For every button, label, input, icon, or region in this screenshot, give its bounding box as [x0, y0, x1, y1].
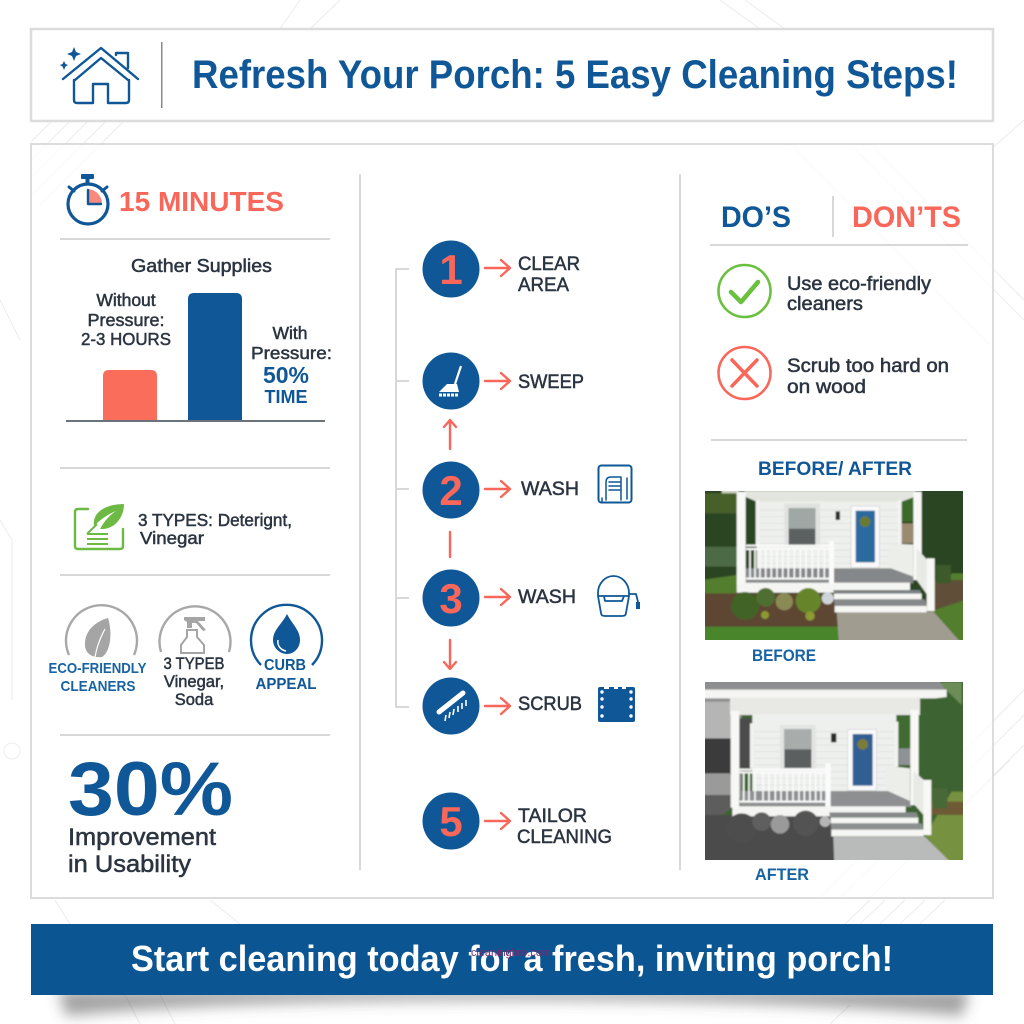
stat: 30 percent: 30% [68, 747, 233, 832]
photo: after [705, 682, 963, 860]
step: scrub: SCRUB [518, 693, 582, 715]
header panel [31, 29, 993, 121]
icon badge: spray bottle types: 3 TYPEB [164, 655, 224, 673]
bar: with pressure [188, 293, 242, 420]
label: with pressure: Pressure: [251, 343, 332, 363]
icon: film strip brush block [598, 686, 635, 722]
step 1: clear area: AREA [518, 274, 569, 296]
icon: bucket [598, 576, 640, 616]
time heading: 15 MINUTES [119, 186, 284, 217]
call to action: Start cleaning today for a fresh, inviting porch! [131, 938, 893, 979]
step 2: wash: WASH [521, 478, 579, 500]
label: without pressure: 2-3 HOURS [81, 329, 171, 349]
label: without pressure: Pressure: [88, 310, 164, 330]
step 5: tailor cleaning: 5 [439, 798, 463, 845]
arrow: up [444, 420, 456, 449]
step 5: tailor cleaning [422, 792, 612, 850]
step 2: wash: 2 [439, 467, 463, 514]
title: Refresh Your Porch: 5 Easy Cleaning Steps! [192, 53, 958, 97]
step 2: wash [422, 462, 632, 518]
label: with pressure: TIME [264, 387, 308, 407]
icon: green leaf note [75, 504, 124, 549]
left column [48, 174, 332, 878]
icon badge: eco-friendly cleaners: CLEANERS [60, 678, 136, 695]
stat caption: in Usability [68, 851, 191, 878]
connector [449, 532, 451, 557]
do item: cleaners [787, 294, 863, 315]
icon badge: spray bottle types: Soda [175, 691, 214, 709]
before label: BEFORE [752, 647, 816, 665]
step 5: tailor cleaning: TAILOR [518, 805, 587, 827]
right column [695, 196, 975, 884]
step 3: wash: WASH [518, 586, 576, 608]
main panel [31, 144, 993, 898]
step: sweep [422, 352, 584, 410]
icon badge: spray bottle types [160, 606, 230, 709]
icon badge: eco-friendly cleaners [48, 605, 146, 695]
don't item [718, 347, 949, 399]
icon: house with sparkles [60, 47, 138, 103]
step 1: clear area [422, 240, 580, 298]
watermark: cleaningbro.com [471, 947, 551, 959]
step 1: clear area: 1 [439, 246, 463, 293]
icon badge: curb appeal drop [251, 605, 322, 693]
cleaner types text: Vinegar [140, 528, 204, 548]
cleaner types text: 3 TYPES: Deterignt, [138, 510, 292, 530]
do item [718, 265, 932, 317]
step: sweep: SWEEP [518, 371, 584, 393]
don't item: Scrub too hard on [787, 356, 949, 377]
label: with pressure [251, 323, 332, 407]
before/after heading: BEFORE/ AFTER [758, 459, 912, 480]
photo: before [705, 491, 963, 640]
don'ts heading: DON’TS [852, 201, 961, 234]
step 3: wash: 3 [439, 575, 463, 622]
center column: steps [396, 240, 640, 850]
cleaner types text [138, 510, 292, 548]
bar: without pressure [103, 370, 157, 420]
stat caption [68, 824, 216, 878]
icon badge: eco-friendly cleaners: ECO-FRIENDLY [48, 660, 146, 677]
do's heading: DO’S [721, 201, 791, 234]
do item: Use eco-friendly [787, 274, 932, 295]
footer banner [31, 924, 993, 1016]
chart heading: Gather Supplies [131, 256, 272, 276]
icon badge: spray bottle types: Vinegar, [164, 673, 224, 691]
arrow: down [444, 640, 456, 669]
label: without pressure [81, 290, 171, 349]
icon badge: curb appeal drop: APPEAL [256, 676, 317, 693]
label: without pressure: Without [96, 290, 156, 310]
don't item: on wood [787, 377, 866, 398]
label: with pressure: With [272, 323, 308, 343]
label: with pressure: 50% [263, 362, 309, 388]
stat caption: Improvement [68, 824, 216, 851]
icon: stopwatch [68, 174, 108, 224]
step 1: clear area: CLEAR [518, 253, 580, 275]
icon badge: curb appeal drop: CURB [264, 657, 306, 674]
after label: AFTER [755, 866, 809, 884]
step 3: wash [422, 570, 640, 626]
icon: document tablet [598, 466, 632, 502]
step 5: tailor cleaning: CLEANING [517, 826, 612, 848]
step: scrub [422, 678, 635, 734]
bar chart: pressure comparison [66, 256, 332, 421]
